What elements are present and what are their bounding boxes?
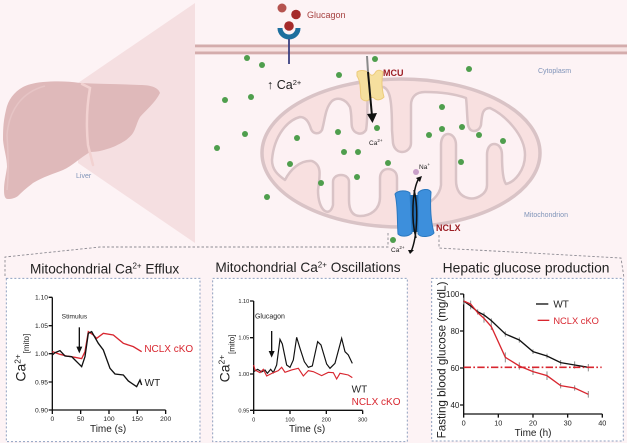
line chart: glucose: 100 — [446, 290, 460, 299]
line chart: oscillations: Time (s) — [289, 424, 325, 435]
line chart: oscillations: WT — [352, 384, 367, 395]
chart frame: oscillations — [213, 278, 407, 442]
zoom cone from liver — [78, 3, 195, 243]
icon: NCLX channel with arrows — [395, 176, 434, 254]
label: sodium: Na — [419, 164, 427, 171]
line chart: efflux: NCLX cKO — [144, 344, 193, 355]
line chart: efflux: 1.00 — [35, 351, 48, 358]
line chart: efflux: 50 — [77, 416, 85, 423]
line chart: glucose: 40 — [598, 418, 606, 427]
cell membrane — [195, 44, 627, 54]
line chart: efflux: Stimulus — [62, 314, 88, 321]
line chart: oscillations: 0 — [252, 417, 255, 423]
label: Cytoplasm: Cytoplasm — [538, 68, 571, 75]
line chart: glucose: 0 — [462, 418, 466, 427]
label: MCU: MCU — [383, 68, 404, 78]
panel heading: oscillations: 2+ — [318, 260, 327, 269]
line chart: glucose: 10 — [494, 418, 502, 427]
panel heading: oscillations: Mitochondrial Ca — [215, 260, 318, 275]
label: Mitochondrion: Mitochondrion — [524, 212, 568, 219]
dashed callout lines — [5, 233, 624, 278]
line chart: efflux: Time (s) — [90, 424, 126, 435]
panel heading: glucose: Hepatic glucose production — [443, 260, 609, 276]
line chart: glucose: 80 — [450, 327, 460, 336]
line chart: glucose — [436, 281, 606, 439]
line chart: oscillations: 100 — [285, 417, 295, 423]
label: Glucagon: Glucagon — [307, 10, 346, 20]
line chart: oscillations: Ca — [216, 364, 232, 382]
line chart: oscillations: 1.10 — [238, 299, 249, 305]
panel heading: efflux: Efflux — [142, 261, 179, 276]
line chart: efflux: Ca — [13, 364, 29, 382]
line chart: oscillations: 1.00 — [238, 372, 249, 378]
line chart: efflux: 150 — [132, 416, 143, 423]
label: sodium: + — [427, 162, 430, 167]
line chart: efflux: 100 — [103, 416, 115, 423]
line chart: efflux: 200 — [160, 416, 171, 423]
label: NCLX: NCLX — [436, 223, 460, 233]
line chart: efflux: 0.90 — [35, 407, 48, 414]
chart frame: glucose — [432, 278, 623, 441]
line chart: oscillations: 2+ — [216, 355, 226, 364]
line chart: glucose: NCLX cKO — [553, 316, 599, 326]
line chart: glucose: 40 — [450, 401, 460, 410]
label: Liver: Liver — [76, 173, 92, 180]
mitochondrion — [262, 79, 540, 227]
line chart: glucose: WT — [553, 300, 569, 311]
line chart: efflux: [mito] — [22, 334, 31, 353]
panel: Mitochondrial Ca2+ Efflux — [6, 261, 200, 442]
panel heading: efflux: Mitochondrial Ca — [30, 261, 132, 276]
line chart: efflux — [13, 295, 193, 435]
panel heading: efflux: 2+ — [132, 262, 142, 271]
panel: Hepatic glucose production — [432, 260, 623, 441]
label: released calcium: 2+ — [399, 245, 405, 250]
panel heading: oscillations: Oscillations — [327, 260, 401, 275]
line chart: glucose: Time (h) — [515, 428, 551, 439]
chart frame: efflux — [6, 278, 200, 442]
label: released calcium: Ca — [391, 247, 399, 254]
line chart: oscillations: [mito] — [228, 334, 237, 354]
icon: MCU channel with arrow — [357, 56, 384, 123]
line chart: glucose: 20 — [529, 418, 537, 427]
line chart: glucose: 60 — [450, 364, 460, 373]
line chart: efflux: WT — [145, 378, 160, 389]
line chart: efflux: 0.95 — [35, 379, 48, 386]
line chart: efflux: 0 — [50, 416, 54, 423]
line chart: oscillations: 200 — [322, 417, 331, 423]
label: increased calcium: ↑ Ca — [267, 78, 293, 92]
icon: glucagon molecules and receptor — [278, 4, 301, 64]
icon: sodium ion — [413, 169, 419, 175]
line chart: oscillations: 300 — [358, 417, 367, 423]
line chart: efflux: 1.05 — [35, 323, 48, 330]
icon: liver — [3, 81, 160, 199]
label: matrix calcium: 2+ — [377, 138, 383, 143]
line chart: glucose: Fasting blood glucose (mg/dL) — [436, 281, 449, 438]
line chart: efflux: 2+ — [13, 354, 23, 364]
label: increased calcium: 2+ — [293, 78, 302, 87]
line chart: glucose: 30 — [564, 418, 572, 427]
line chart: oscillations: 1.05 — [238, 336, 249, 342]
line chart: oscillations: Glucagon — [255, 314, 285, 321]
line chart: efflux: 1.10 — [35, 295, 48, 302]
line chart: oscillations: 0.95 — [238, 408, 249, 414]
line chart: oscillations — [216, 299, 401, 435]
line chart: oscillations: NCLX cKO — [352, 397, 401, 408]
label: matrix calcium: Ca — [369, 140, 377, 147]
panel: Mitochondrial Ca2+ Oscillations — [213, 260, 407, 442]
calcium ions — [214, 55, 506, 243]
